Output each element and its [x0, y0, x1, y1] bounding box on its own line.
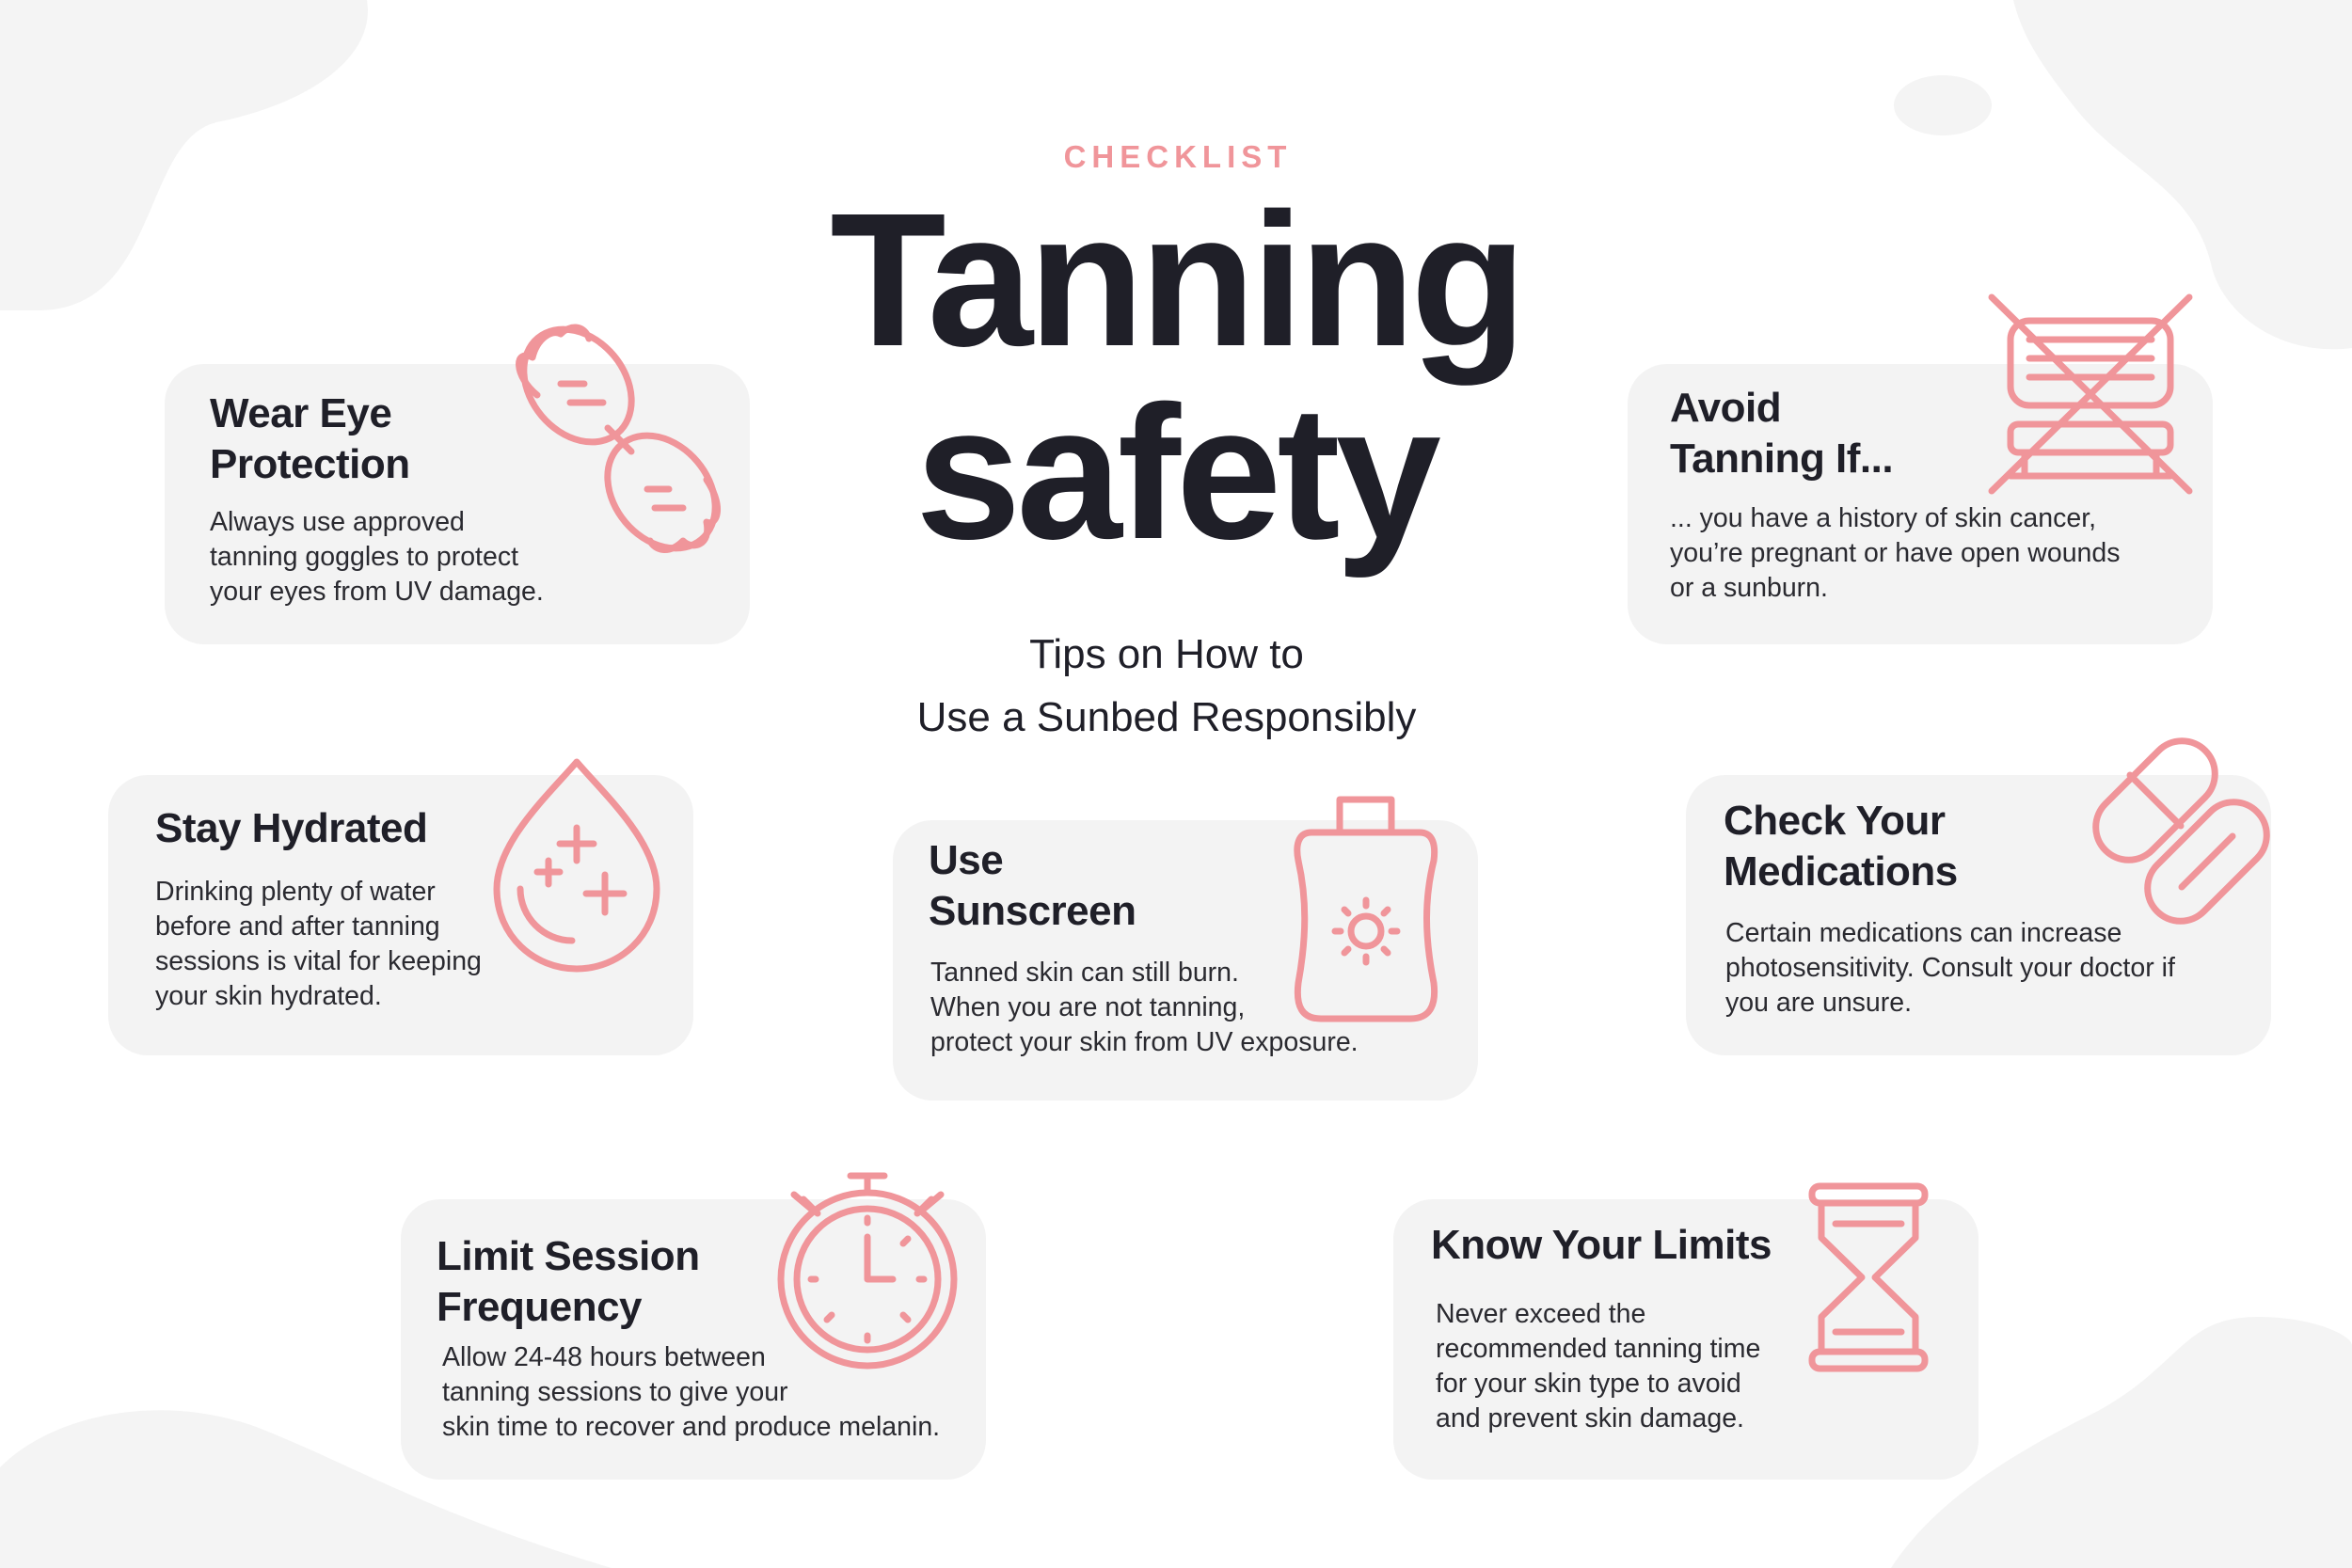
heading: Avoid: [1670, 385, 1781, 431]
text: you are unsure.: [1725, 988, 1912, 1018]
text: Always use approved: [210, 507, 465, 537]
heading: Medications: [1724, 848, 1958, 895]
text: you’re pregnant or have open wounds: [1670, 538, 2121, 568]
heading: Tanning If...: [1670, 436, 1893, 482]
heading: Wear Eye: [210, 390, 391, 436]
icon: hourglass: [1808, 1183, 1929, 1371]
text: or a sunburn.: [1670, 573, 1828, 603]
heading: [1724, 798, 1958, 895]
text: ... you have a history of skin cancer,: [1670, 503, 2096, 533]
icon: goggles: [516, 324, 721, 553]
panel: wear eye protection: [165, 364, 750, 644]
icon: stopwatch: [777, 1172, 958, 1370]
text: and prevent skin damage.: [1436, 1403, 1744, 1433]
text: Certain medications can increase: [1725, 918, 2122, 948]
subtitle: Use a Sunbed Responsibly: [917, 694, 1416, 740]
text: Never exceed the: [1436, 1299, 1645, 1329]
text: sessions is vital for keeping: [155, 946, 482, 976]
heading: Sunscreen: [929, 888, 1136, 934]
panel: limit session frequency: [401, 1199, 986, 1480]
text: Allow 24-48 hours between: [442, 1342, 766, 1372]
text: When you are not tanning,: [930, 992, 1245, 1022]
heading: Protection: [210, 441, 410, 487]
text: skin time to recover and produce melanin.: [442, 1412, 940, 1442]
text: Tanned skin can still burn.: [930, 958, 1239, 988]
text: tanning goggles to protect: [210, 542, 518, 572]
heading: Limit Session: [437, 1233, 700, 1279]
text: recommended tanning time: [1436, 1334, 1760, 1364]
icon: pills: [2092, 737, 2270, 925]
heading: [929, 837, 1136, 934]
text: [210, 507, 544, 607]
text: tanning sessions to give your: [442, 1377, 788, 1407]
title: Tanning: [830, 173, 1522, 386]
text: [1725, 918, 2175, 1018]
text: [442, 1342, 940, 1442]
heading: [437, 1233, 700, 1330]
title: safety: [915, 366, 1437, 578]
heading: Check Your: [1724, 798, 1945, 844]
panel: stay hydrated: [108, 775, 693, 1055]
panel: use sunscreen: [893, 820, 1478, 1101]
icon: crossed sunbed: [1989, 293, 2192, 495]
text: [1670, 503, 2121, 603]
text: photosensitivity. Consult your doctor if: [1725, 953, 2175, 983]
text: [155, 877, 482, 1011]
text: Drinking plenty of water: [155, 877, 436, 907]
icon: sunscreen bottle: [1294, 796, 1438, 1022]
panel: avoid tanning: [1628, 364, 2213, 644]
text: for your skin type to avoid: [1436, 1369, 1741, 1399]
heading: Know Your Limits: [1431, 1222, 1772, 1268]
title: [830, 173, 1522, 578]
text: [1436, 1299, 1760, 1433]
heading: [1670, 385, 1893, 482]
heading: Stay Hydrated: [155, 805, 427, 851]
text: your skin hydrated.: [155, 981, 382, 1011]
text: [930, 958, 1359, 1057]
subtitle: Tips on How to: [1029, 631, 1304, 677]
text: before and after tanning: [155, 911, 440, 942]
heading: Use: [929, 837, 1003, 883]
heading: Frequency: [437, 1284, 642, 1330]
text: your eyes from UV damage.: [210, 577, 544, 607]
subtitle: [917, 631, 1417, 740]
header: checklist label: CHECKLIST: [1064, 139, 1292, 174]
heading: [210, 390, 410, 487]
text: protect your skin from UV exposure.: [930, 1027, 1359, 1057]
icon: water drop: [493, 758, 660, 973]
panel: know your limits: [1393, 1199, 1979, 1480]
panel: check medications: [1686, 775, 2271, 1055]
